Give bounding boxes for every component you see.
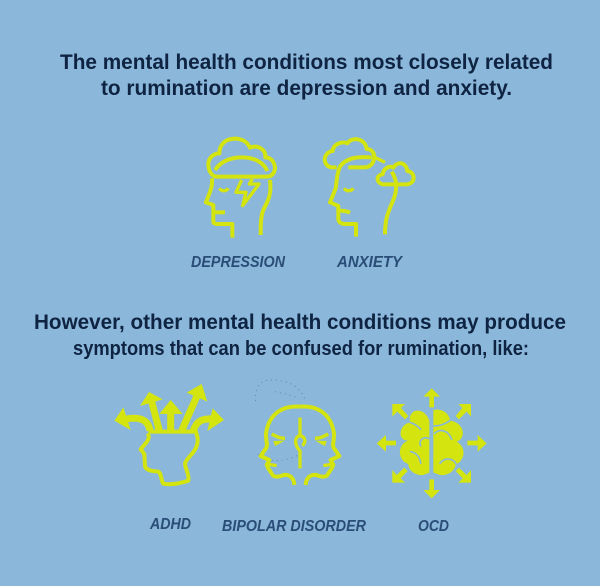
heading: related conditions [60, 51, 553, 100]
label: bipolar disorder: BIPOLAR DISORDER [222, 518, 367, 535]
icon: anxiety head with clouds [325, 139, 414, 237]
heading: other conditions: However, other mental health conditions may produce [34, 311, 566, 334]
icon: bipolar disorder two faces [256, 380, 339, 485]
heading: related conditions: The mental health conditions most closely related [60, 51, 553, 74]
heading: related conditions: to rumination are depression and anxiety. [101, 77, 512, 100]
icon: OCD brain with arrows [377, 388, 487, 498]
label: ADHD: ADHD [149, 516, 191, 533]
label: depression: DEPRESSION [191, 254, 286, 271]
label: anxiety: ANXIETY [336, 254, 404, 271]
icon: depression head with storm cloud [206, 139, 275, 238]
icon: ADHD head with arrows [114, 384, 224, 484]
label: OCD: OCD [418, 518, 449, 535]
heading: other conditions [34, 311, 566, 360]
heading: other conditions: symptoms that can be confused for rumination, like: [73, 337, 529, 360]
